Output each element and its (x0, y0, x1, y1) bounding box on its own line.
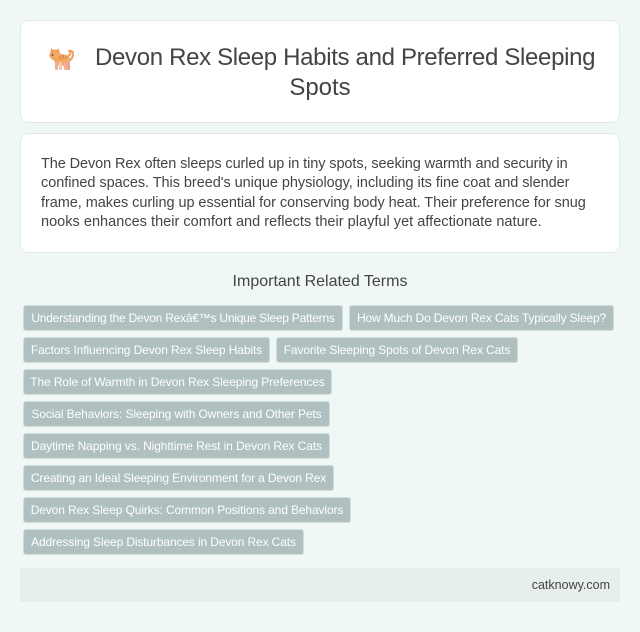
text block: description: nooks enhances their comfort and reflects their playful yet affectionate nature. (41, 214, 542, 230)
text block: description: The Devon Rex often sleeps curled up in tiny spots, seeking warmth and security in (41, 156, 568, 172)
icon: cat (50, 48, 74, 70)
tag 5: The Role of Warmth in Devon Rex Sleeping Preferences (30, 375, 325, 389)
tag 4 (276, 337, 518, 363)
title: Devon Rex Sleep Habits and Preferred Sleeping (95, 44, 595, 71)
tag 6: Social Behaviors: Sleeping with Owners and Other Pets (31, 407, 322, 421)
tag 8: Creating an Ideal Sleeping Environment for a Devon Rex (31, 471, 326, 485)
title (95, 44, 595, 101)
tag 5 (23, 369, 332, 395)
panel: description (20, 133, 620, 253)
tag 1 (23, 305, 343, 331)
text block: description (41, 156, 586, 230)
tag 8 (23, 465, 334, 491)
tag list (23, 305, 614, 555)
tag 1: Understanding the Devon Rexâ€™s Unique Sleep Patterns (31, 311, 335, 325)
tag 7: Daytime Napping vs. Nighttime Rest in Devon Rex Cats (31, 439, 322, 453)
tag 10 (23, 529, 304, 555)
tag 6 (23, 401, 330, 427)
tag 4: Favorite Sleeping Spots of Devon Rex Cats (284, 343, 510, 357)
tag 3: Factors Influencing Devon Rex Sleep Habits (31, 343, 262, 357)
footer bar (20, 568, 620, 602)
tag 7 (23, 433, 330, 459)
panel: title card (20, 20, 620, 123)
tag 10: Addressing Sleep Disturbances in Devon Rex Cats (31, 535, 296, 549)
tag 9 (23, 497, 351, 523)
tag 3 (23, 337, 270, 363)
text block: description: confined spaces. This breed's unique physiology, including its fine coat and slender (41, 175, 569, 191)
footer text: catknowy.com (532, 578, 610, 592)
text block: description: frame, makes curling up essential for conserving body heat. Their preference for snug (41, 195, 586, 211)
tag 9: Devon Rex Sleep Quirks: Common Positions and Behaviors (31, 503, 343, 517)
title: Spots (289, 74, 351, 101)
tag 2: How Much Do Devon Rex Cats Typically Sleep? (357, 311, 606, 325)
heading: related terms: Important Related Terms (233, 273, 407, 290)
tag 2 (349, 305, 614, 331)
